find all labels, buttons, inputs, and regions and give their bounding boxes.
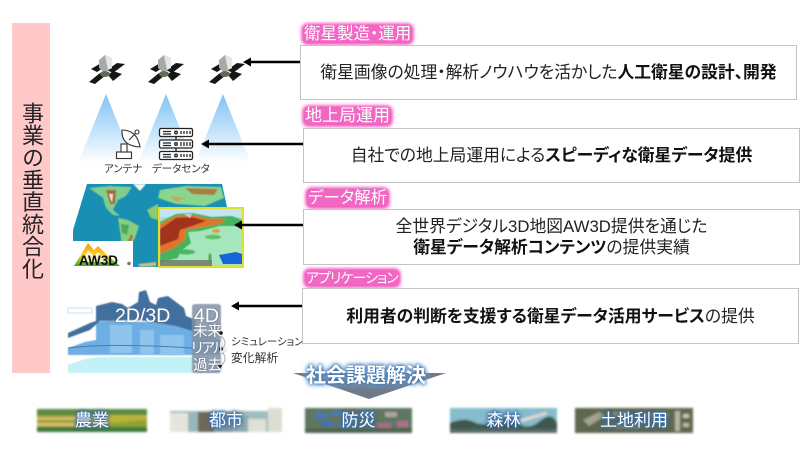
icon: satellite 1 xyxy=(89,55,125,84)
tag: application: アプリケーション xyxy=(306,270,398,286)
inset: 3D terrain image xyxy=(158,207,244,268)
illustration: city layers 2D/3D and 4D xyxy=(67,290,226,374)
heading: solving social issues: 社会課題解決 xyxy=(306,365,426,387)
tile: forest xyxy=(448,406,559,435)
tile: land use xyxy=(573,406,695,435)
label: forest: 森林 xyxy=(486,411,520,430)
world map ocean xyxy=(73,184,227,267)
icon: data center server rack xyxy=(160,128,192,160)
label: simulation: シミュレーション xyxy=(231,336,303,348)
arrow: downward triangle to social issues xyxy=(293,373,446,399)
beam: right xyxy=(195,94,251,163)
icon: antenna xyxy=(116,130,140,158)
panel: ground station operations: 自社での地上局運用によるスピーディな衛星データ提供 xyxy=(351,146,752,165)
panel: satellite manufacturing: 衛星画像の処理・解析ノウハウを活かした人工衛星の設計、開発 xyxy=(320,63,777,82)
illustration: satellites and ground station xyxy=(80,55,248,160)
label: agriculture: 農業 xyxy=(75,411,109,430)
tag: ground station operations: 地上局運用 xyxy=(305,106,390,125)
label: data center: データセンタ xyxy=(152,163,210,175)
arrow: ground station to data center xyxy=(201,140,303,148)
tile: city xyxy=(169,407,283,434)
arrow: data analysis to terrain xyxy=(234,220,303,230)
city layer: present xyxy=(68,320,220,355)
label: antenna: アンテナ xyxy=(104,163,142,175)
world map land xyxy=(89,184,224,267)
arrow: application to city xyxy=(231,302,302,310)
city layer: past xyxy=(68,357,220,373)
panel: vertical integration sidebar xyxy=(12,23,50,373)
tag: satellite manufacturing: 衛星製造・運用 xyxy=(304,25,411,43)
label: past: 過去 xyxy=(193,358,222,374)
tile: disaster prevention xyxy=(303,406,414,435)
label: future: 未来 xyxy=(193,324,222,340)
AW3D logo xyxy=(73,241,133,268)
illustration: AW3D world map xyxy=(73,184,244,268)
icon: satellite 3 xyxy=(209,55,245,84)
label: 4D: 4D xyxy=(194,305,219,327)
sidebar heading: 事業の垂直統合化 xyxy=(19,102,44,280)
beam: left xyxy=(78,94,134,163)
label: 2D/3D: 2D/3D xyxy=(115,305,170,327)
beam: centre xyxy=(138,94,194,163)
panel: satellite manufacturing xyxy=(300,45,797,100)
label: real: リアル xyxy=(191,341,225,357)
simulation curves xyxy=(221,336,225,366)
label: city: 都市 xyxy=(209,411,243,430)
panel: application xyxy=(302,288,799,344)
panel: data analysis xyxy=(303,209,800,265)
AW3D logo: AW3D xyxy=(79,253,118,268)
icon: satellite 2 xyxy=(148,55,184,84)
small tag xyxy=(68,308,92,313)
panel: ground station operations xyxy=(303,128,800,183)
4D backing panels xyxy=(192,304,221,373)
label: land use: 土地利用 xyxy=(600,411,668,430)
city layer: 2D/3D skyline xyxy=(68,290,196,338)
panel: data analysis: 全世界デジタル3D地図AW3D提供を通じた xyxy=(396,217,707,236)
tile: agriculture xyxy=(35,407,149,434)
label: change analysis: 変化解析 xyxy=(231,351,278,365)
label: disaster prevention: 防災 xyxy=(342,411,376,430)
arrow: manufacturing to satellites xyxy=(243,58,300,66)
panel: data analysis: 衛星データ解析コンテンツの提供実績 xyxy=(413,238,690,257)
tag: data analysis: データ解析 xyxy=(308,189,387,207)
panel: application: 利用者の判断を支援する衛星データ活用サービスの提供 xyxy=(346,306,755,326)
